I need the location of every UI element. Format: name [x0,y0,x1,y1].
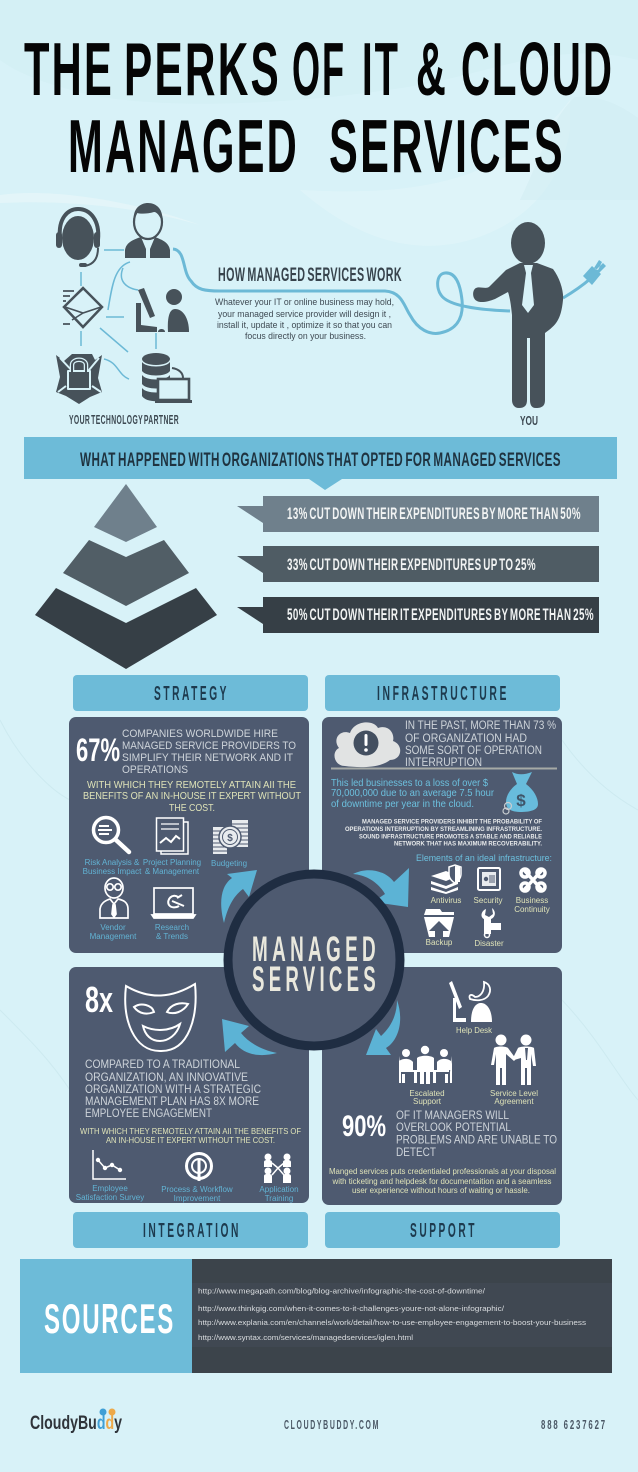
icon labels: infrastructure top row: Business [516,896,548,905]
text: remotely attain: WITH WHICH THEY REMOTELY ATTAIN AII THE BENEFITS OF [80,1127,301,1136]
text: loss of over 70 million [331,777,494,810]
list: source links: http://www.thinkgig.com/when-it-comes-to-it-challenges-youre-not-alone-infographic/ [198,1304,504,1313]
text: managed service providers inhibit: MANAGED SERVICE PROVIDERS INHIBIT THE PROBABILITY OF [362,818,542,826]
callout: 13 percent [237,496,599,532]
title: IT [362,27,400,111]
icon: plug [583,260,606,285]
list: source links: http://www.megapath.com/blog/blog-archive/infographic-the-cost-of-downtime/ [198,1286,485,1296]
icon labels: integration: Training [265,1194,293,1203]
text: remotely attain: AN IN-HOUSE IT EXPERT WITHOUT THE COST. [106,1136,275,1145]
center circle: managed services [228,874,400,1046]
banner: what happened [24,437,617,490]
icon labels: strategy bottom row: Vendor [100,923,126,932]
icon: headset agent [56,209,100,267]
icon labels: infrastructure top row [431,896,550,914]
text: compared to a traditional [85,1057,261,1120]
text: managed service providers inhibit: OPERATIONS INTERRUPTION BY STREAMLINING INFRASTRUCTURE. [345,826,542,833]
icon: budgeting coins: $ [227,833,233,844]
center circle: managed services: MANAGED [252,930,380,969]
title: & [416,27,448,111]
logo: cloudybuddy: CloudyBuddy [30,1413,122,1434]
arrow: infrastructure to support [366,1000,400,1055]
icon: business continuity [521,869,545,891]
icon: money bag [503,772,538,814]
panel: strategy [69,717,309,953]
text: remotely attain [80,1127,301,1145]
icon labels: integration: Application [259,1185,299,1194]
icon: alert cloud [334,722,400,767]
header: strategy: STRATEGY [154,683,229,705]
label: you: YOU [520,413,538,428]
icon labels: strategy top row [83,858,247,876]
icon labels: infrastructure top row: Continuity [514,905,550,914]
panel: support [322,967,562,1205]
icon: target [186,1154,212,1181]
text: loss of over 70 million: This led businesses to a loss of over $ [331,777,488,789]
icon: database and laptop [142,353,192,403]
text: companies worldwide [122,728,296,776]
icon labels: support [409,1089,538,1106]
icon: network training [264,1154,291,1183]
text: loss of over 70 million: 70,000,000 due to an average 7.5 hour [331,787,494,799]
text: how it works description: focus directly on your business. [245,330,366,341]
icon labels: infrastructure bottom row: Disaster [474,939,504,948]
text: loss of over 70 million: of downtime per year in the cloud. [331,798,474,810]
text: how it works description [215,296,394,341]
icon: envelope [63,288,102,327]
icon: disaster wrench [482,908,501,938]
text: in the past [405,720,556,769]
text: in the past: OF ORGANIZATION HAD [405,733,527,745]
icon: shield with lock [56,354,102,404]
icon labels: strategy bottom row [90,923,189,941]
text: how it works description: Whatever your IT or online business may hold, [215,296,394,307]
footer: website: CLOUDYBUDDY.COM [284,1418,380,1432]
header: infrastructure [325,675,560,711]
header: strategy [73,675,308,711]
callout: 33 percent [237,546,599,582]
icon: money bag: $ [516,791,526,810]
header: support: SUPPORT [410,1220,477,1242]
text: companies worldwide: COMPANIES WORLDWIDE HIRE [122,728,278,740]
text: of it managers [396,1108,557,1159]
text: of it managers: PROBLEMS AND ARE UNABLE TO [396,1132,557,1146]
stat: 67%: 67% [76,732,120,768]
icon: backup folder [424,909,454,937]
icon: escalated support team [399,1046,452,1084]
heading: how managed services work: HOW MANAGED SERVICES WORK [218,265,402,286]
icon: service level handshake [491,1034,536,1085]
icon labels: strategy top row: & Management [145,867,200,876]
icon labels: strategy bottom row: Management [90,932,137,941]
icon labels: strategy top row: Project Planning [143,858,201,867]
list: source links [198,1286,586,1342]
icon: magnifier [94,818,129,852]
text: compared to a traditional: COMPARED TO A TRADITIONAL [85,1057,240,1071]
icon: help desk [449,981,492,1022]
text: in the past: IN THE PAST, MORE THAN 73 % [405,720,556,732]
stat: 8x: 8x [85,979,113,1020]
label: your technology partner: YOUR TECHNOLOGY PARTNER [69,413,179,427]
text: how it works description: install it, update it , optimize it so that you can [217,319,392,330]
icon: manager [125,203,170,258]
list: source links: http://www.syntax.com/services/managedservices/iglen.html [198,1333,413,1342]
text: managed services puts [329,1167,556,1195]
panel: sources [20,1259,612,1373]
figure: you [473,222,563,408]
icon labels: infrastructure bottom row [426,938,504,948]
icon: vendor [100,878,128,918]
icon labels: strategy bottom row: Research [155,923,189,932]
list: source links: http://www.explania.com/en/channels/work/detail/how-to-use-employee-engagement-to-boost-your-business [198,1318,586,1327]
icon labels: integration: Employee [92,1184,128,1193]
icon: budgeting coins [213,820,248,854]
arrow: integration to strategy [221,870,257,923]
title: PERKS [124,27,281,111]
icon labels: support: Agreement [494,1097,534,1106]
center circle: managed services: SERVICES [252,960,380,999]
icon labels: integration: Satisfaction Survey [76,1193,144,1202]
text: remotely attain [83,780,301,814]
text: managed service providers inhibit [345,818,542,848]
callout: 50 percent [237,597,599,633]
arrow: support to integration [222,1019,277,1055]
text: compared to a traditional: ORGANIZATION WITH A STRATEGIC [85,1082,261,1096]
icon label: help desk: Help Desk [456,1026,492,1035]
header: integration: INTEGRATION [143,1220,241,1242]
text: in the past: SOME SORT OF OPERATION [405,745,542,757]
text: compared to a traditional: ORGANIZATION, AN INNOVATIVE [85,1070,248,1084]
text: remotely attain: THE COST. [169,803,215,814]
icon: satisfaction chart [93,1150,126,1179]
text: compared to a traditional: EMPLOYEE ENGAGEMENT [85,1106,212,1120]
icon: project document [156,818,188,854]
heading: elements of an ideal infrastructure: Elements of an ideal infrastructure: [416,853,552,864]
text: in the past: INTERRUPTION [405,757,482,769]
text: compared to a traditional: MANAGEMENT PLAN HAS 8X MORE [85,1094,259,1108]
arrow: strategy to infrastructure [353,868,409,907]
icon: research laptop [152,888,195,918]
text: of it managers: OF IT MANAGERS WILL [396,1108,509,1122]
connector lines between partner icons [81,250,156,379]
icon labels: integration [76,1184,299,1203]
header: infrastructure: INFRASTRUCTURE [377,683,509,705]
title: THE [24,27,114,111]
title: OF [292,27,346,111]
text: companies worldwide: MANAGED SERVICE PROVIDERS TO [122,740,296,752]
icon labels: infrastructure bottom row: Backup [426,938,453,947]
header: support [325,1212,560,1248]
cable from partner to you [173,249,590,333]
text: managed service providers inhibit: NETWORK THAT HAS MAXIMUM RECOVERABILITY. [394,840,542,848]
text: companies worldwide: SIMPLIFY THEIR NETWORK AND IT [122,752,293,764]
title: MANAGED [68,104,299,188]
panel: infrastructure [322,717,562,953]
text: companies worldwide: OPERATIONS [122,764,188,776]
icon: antivirus [431,865,461,894]
icon labels: strategy top row: Budgeting [211,859,247,868]
text: of it managers: DETECT [396,1145,436,1159]
icon labels: strategy top row: Risk Analysis & [85,858,140,867]
text: managed service providers inhibit: SOUND INFRASTRUCTURE PROMOTES A STABLE AND RELIABLE [359,834,542,840]
icon labels: integration: Improvement [174,1194,221,1203]
icon: mask [125,984,196,1051]
icon labels: support: Escalated [409,1089,445,1098]
heading: sources: SOURCES [44,1295,175,1342]
stat: 90%: 90% [342,1110,386,1143]
text: of it managers: OVERLOOK POTENTIAL [396,1120,511,1134]
text: remotely attain: BENEFITS OF AN IN-HOUSE IT EXPERT WITHOUT [83,791,301,802]
icon: safe [478,868,500,890]
text: remotely attain: WITH WHICH THEY REMOTELY ATTAIN AII THE [87,780,296,791]
panel: integration [69,967,309,1203]
text: managed services puts: with ticketing and helpdesk for documentaition and a seamless [332,1177,552,1186]
icon labels: integration: Process & Workflow [161,1185,233,1194]
header: integration [73,1212,308,1248]
icon: person at desk [136,288,189,332]
icon labels: support: Support [413,1097,442,1106]
icon labels: infrastructure top row: Antivirus [431,896,461,905]
chart: pyramid [35,484,217,669]
text: managed services puts: user experience without hours of waiting or hassle. [352,1186,530,1195]
icon labels: strategy bottom row: & Trends [156,932,188,941]
text: how it works description: your managed service provider will design it , [218,308,391,319]
icon labels: infrastructure top row: Security [474,896,502,905]
icon labels: strategy top row: Business Impact [83,867,142,876]
text: managed services puts: Manged services puts credentialed professionals at your disposal [329,1167,556,1176]
icon labels: support: Service Level [490,1089,538,1098]
title [24,27,614,188]
